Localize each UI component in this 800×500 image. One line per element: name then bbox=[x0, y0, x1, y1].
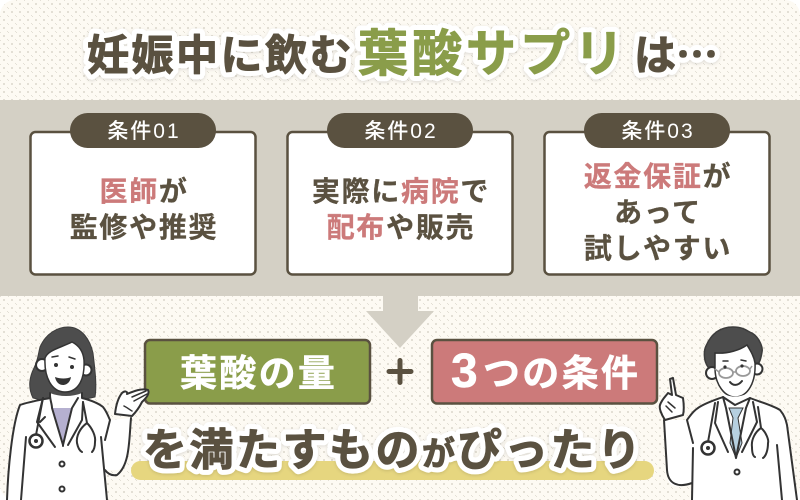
panel: condition 03 bbox=[544, 113, 770, 274]
panel: condition 03: 試しやすい bbox=[584, 233, 732, 264]
panel: condition 02: 実際に病院で bbox=[312, 176, 490, 207]
title bbox=[87, 22, 718, 83]
panel: condition 02: 配布や販売 bbox=[327, 212, 475, 243]
panel: condition 02: 条件02 bbox=[364, 120, 438, 143]
title: 妊娠中に飲む bbox=[87, 32, 354, 79]
bottom message: を満たすものがぴったり bbox=[143, 426, 644, 475]
panel: condition 01 bbox=[30, 113, 256, 274]
panel: condition 03: あって bbox=[614, 197, 702, 228]
title: 妊娠中に飲む bbox=[87, 32, 354, 79]
panel: condition 03: 返金保証が bbox=[584, 160, 732, 192]
panel: condition 01: 条件01 bbox=[107, 120, 181, 143]
title: は… bbox=[634, 22, 718, 83]
panel: condition 01: 医師が bbox=[99, 175, 189, 207]
yellow highlight bar bbox=[131, 461, 654, 480]
green box: folic acid amount bbox=[145, 340, 370, 404]
icon: female doctor bbox=[7, 327, 149, 500]
panel: condition 02 bbox=[288, 113, 512, 274]
title: 葉酸サプリ bbox=[358, 26, 628, 82]
title: は… bbox=[634, 22, 718, 83]
arrow bbox=[366, 296, 434, 348]
bottom message: を満たすものがぴったり bbox=[143, 426, 644, 475]
panel: condition 01: 監修や推奨 bbox=[70, 212, 218, 243]
panel: conditions band bbox=[0, 100, 800, 296]
plus sign bbox=[389, 360, 411, 382]
panel: condition 03: 条件03 bbox=[621, 120, 695, 143]
red box: three conditions bbox=[432, 340, 657, 404]
red box: three conditions: 3 bbox=[451, 345, 478, 398]
green box: folic acid amount: 葉酸の量 bbox=[180, 353, 337, 394]
icon: male doctor bbox=[660, 327, 797, 500]
red box: three conditions: つの条件 bbox=[483, 353, 640, 394]
title: 葉酸サプリ bbox=[358, 26, 628, 82]
